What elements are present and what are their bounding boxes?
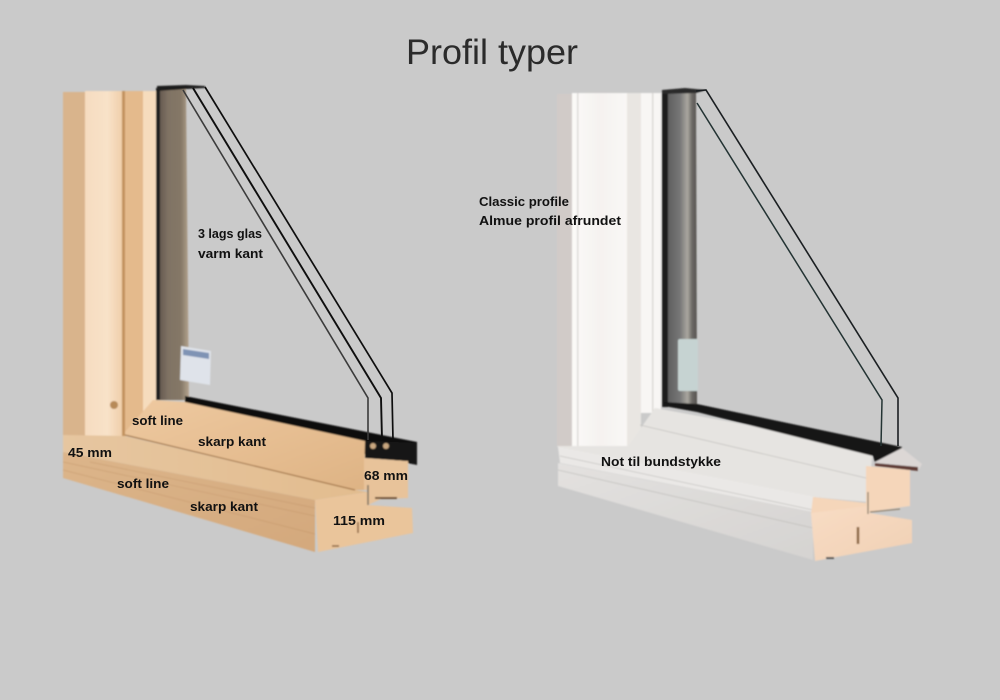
- label: Almue profil afrundet: Almue profil afrundet: [479, 213, 622, 228]
- end grain: [811, 466, 912, 561]
- bottom black glazing strip: [185, 396, 417, 465]
- label: varm kant: varm kant: [198, 246, 264, 261]
- black gasket end: [365, 441, 417, 465]
- title: Profil typer: [406, 33, 578, 72]
- sash and sill bottom: [557, 408, 873, 560]
- glass spacer: [662, 88, 706, 407]
- sticker: [180, 346, 211, 385]
- panel: white window profile: [479, 88, 922, 561]
- glass panes: [696, 90, 898, 446]
- frame sill: [63, 435, 413, 552]
- label: soft line lower: soft line: [117, 476, 169, 491]
- black glazing strip: [664, 402, 902, 466]
- photo: white window section: [557, 88, 922, 561]
- sticker: [678, 339, 698, 391]
- label: skarp kant upper: skarp kant: [198, 434, 267, 449]
- sash rail: [125, 400, 408, 505]
- vertical frame: [557, 93, 661, 446]
- panel: pine window profile: [63, 85, 417, 552]
- label: 68 mm: 68 mm: [364, 468, 408, 483]
- label: Not til bundstykke: Not til bundstykke: [601, 454, 721, 469]
- glass spacer: [156, 85, 205, 400]
- label: Classic profile: Classic profile: [479, 194, 569, 209]
- label: skarp kant lower: skarp kant: [190, 499, 259, 514]
- label: 3 lags glas: 3 lags glas: [198, 226, 262, 241]
- label: 45 mm: 45 mm: [68, 445, 112, 460]
- vertical frame: [63, 91, 156, 437]
- sill drip: [875, 448, 922, 471]
- photo: pine window section: [63, 85, 417, 552]
- glass panes: [183, 87, 393, 440]
- label: soft line upper: soft line: [132, 413, 183, 428]
- label: 115 mm: 115 mm: [333, 513, 385, 528]
